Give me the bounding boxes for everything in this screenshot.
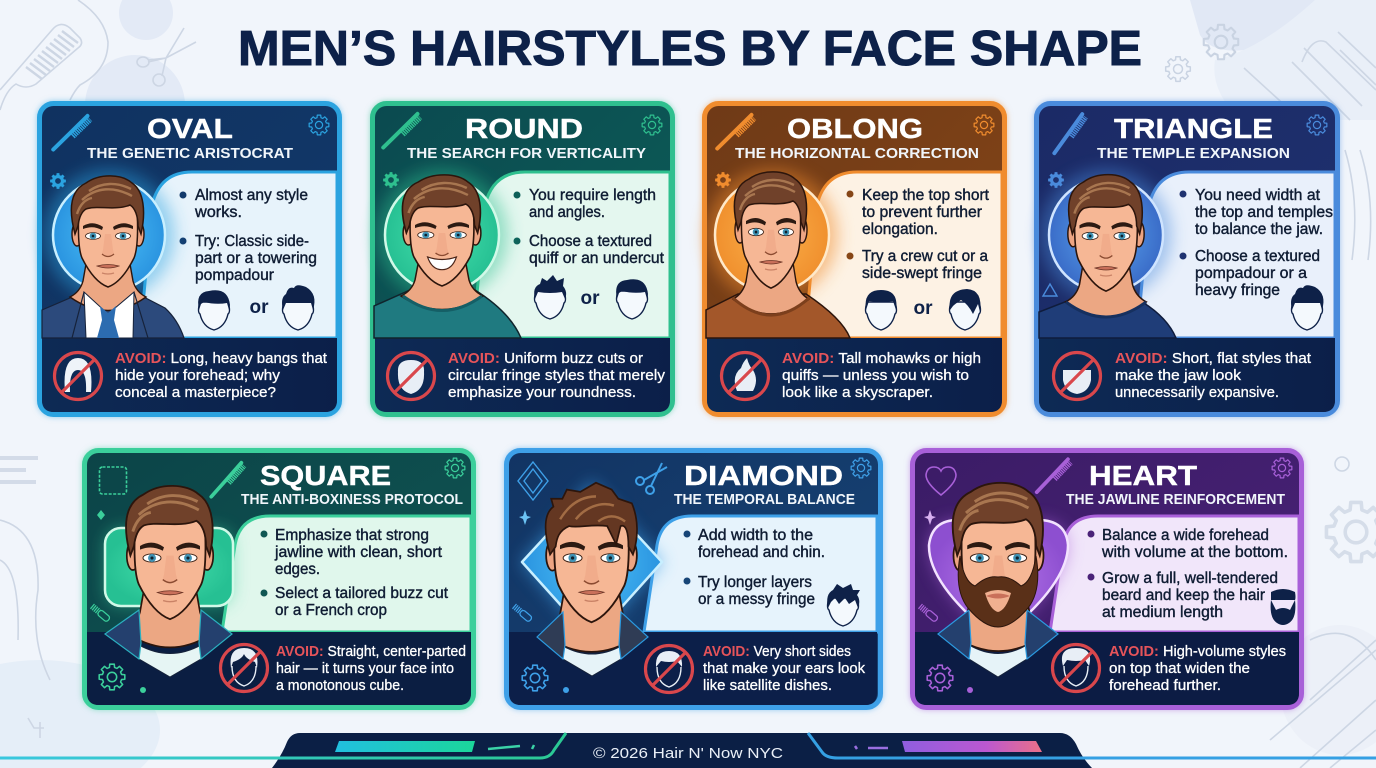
avoid band <box>87 632 471 705</box>
sparkle <box>924 510 936 525</box>
icon: gear <box>1307 115 1327 135</box>
subheading: THE SEARCH FOR VERTICALITY <box>407 146 646 162</box>
avoid text: AVOID: Tall mohawks or high <box>782 350 981 367</box>
icon: small gear <box>715 172 731 188</box>
icon: heart outline <box>926 467 956 495</box>
panel: square <box>84 450 474 708</box>
portrait <box>105 486 233 677</box>
avoid text: quiffs — unless you wish to <box>782 367 969 384</box>
avoid text: hide your forehead; why <box>115 367 281 384</box>
avoid text: a monotonous cube. <box>276 677 404 694</box>
icon: gear lower <box>522 665 548 691</box>
icon: textured pompadour <box>1291 285 1323 330</box>
tips panel <box>644 516 877 632</box>
icon: no center part <box>220 644 268 692</box>
icon: no high volume <box>1052 644 1100 692</box>
icon: undercut <box>616 279 648 319</box>
avoid band <box>42 338 337 412</box>
avoid text <box>1115 350 1312 401</box>
subheading: THE TEMPLE EXPANSION <box>1097 146 1290 162</box>
subheading: THE ANTI-BOXINESS PROTOCOL <box>241 492 463 508</box>
icon: scissors <box>636 463 667 494</box>
avoid text: AVOID: Very short sides <box>703 643 851 660</box>
avoid band <box>915 632 1299 705</box>
avoid text: emphasize your roundness. <box>448 384 636 401</box>
avoid text <box>703 643 865 694</box>
heading: oblong: OBLONG <box>787 113 923 144</box>
bullet text: elongation. <box>862 221 938 238</box>
bullet text <box>846 187 990 282</box>
portrait <box>374 169 521 338</box>
bullet text: jawline with clean, short <box>274 544 443 561</box>
avoid text: forehead further. <box>1109 677 1221 694</box>
bullet text: side-swept fringe <box>862 265 982 282</box>
avoid text: unnecessarily expansive. <box>1115 384 1279 401</box>
icon: gear lower <box>927 665 953 691</box>
icon: quiff <box>534 275 566 319</box>
bullet text: and angles. <box>529 204 605 221</box>
bullet text: Choose a textured <box>529 233 652 250</box>
icon: gear <box>974 115 994 135</box>
heading: oval: OVAL <box>147 113 233 144</box>
avoid text <box>1109 643 1286 694</box>
avoid band <box>707 338 1002 412</box>
portrait <box>520 480 664 676</box>
avoid text <box>276 643 466 694</box>
bullet text: Try: Classic side- <box>195 233 309 250</box>
bullet text <box>684 527 825 608</box>
icon: comb <box>380 114 421 148</box>
icon: hair clip <box>90 604 111 622</box>
tips panel <box>222 516 471 632</box>
panel: triangle <box>1036 104 1338 414</box>
bullet text: Almost any style <box>195 187 308 204</box>
icon: small gear <box>1048 172 1064 188</box>
footer right line <box>808 733 1376 758</box>
bullet text: works. <box>194 204 242 221</box>
bullet text: edges. <box>275 561 320 578</box>
bullet text: Choose a textured <box>1195 248 1320 265</box>
icon: no mohawk <box>722 352 768 400</box>
portrait <box>1039 169 1176 338</box>
or: or <box>580 288 600 309</box>
copyright: © 2026 Hair N' Now NYC <box>593 745 783 762</box>
avoid text: like satellite dishes. <box>703 677 832 694</box>
footer left line <box>0 733 566 758</box>
icon: comb <box>208 463 245 497</box>
heading: round: ROUND <box>465 113 583 144</box>
bullet text <box>1180 187 1333 299</box>
title: MEN’S HAIRSTYLES BY FACE SHAPE <box>238 22 1142 76</box>
bullet text: part or a towering <box>195 250 317 267</box>
avoid text: AVOID: Uniform buzz cuts or <box>448 350 643 367</box>
icon: diamond outline <box>518 462 548 500</box>
icon: no buzz cut <box>388 352 434 400</box>
bullet text: Emphasize that strong <box>275 527 429 544</box>
icon: pompadour <box>282 285 314 330</box>
panel: round <box>372 104 672 414</box>
panel: diamond <box>506 450 880 708</box>
avoid band <box>509 632 877 705</box>
avoid text <box>448 350 666 401</box>
avoid text <box>782 350 981 401</box>
icon: side part <box>198 290 230 330</box>
avoid text: AVOID: Straight, center-parted <box>276 643 466 660</box>
bullet text: Select a tailored buzz cut <box>275 585 449 602</box>
avoid text: AVOID: Short, flat styles that <box>1115 350 1312 367</box>
bullet text: You need width at <box>1195 187 1321 204</box>
subheading: THE GENETIC ARISTOCRAT <box>87 146 293 162</box>
icon: beard <box>1271 589 1296 625</box>
icon: small gear <box>383 172 399 188</box>
sparkle <box>519 510 531 525</box>
subheading: THE HORIZONTAL CORRECTION <box>735 146 979 162</box>
icon: gear <box>309 115 329 135</box>
bullet text: pompadour <box>195 267 274 284</box>
icon: comb <box>1050 114 1087 154</box>
bullet text: Balance a wide forehead <box>1102 527 1269 544</box>
footer left dashes <box>488 745 534 749</box>
icon: no bangs <box>54 352 102 400</box>
tips panel <box>1137 172 1335 338</box>
bullet text: heavy fringe <box>1195 282 1280 299</box>
bullet text <box>514 187 665 267</box>
heading: triangle: TRIANGLE <box>1114 113 1273 144</box>
icon: comb <box>1033 459 1072 493</box>
bullet text: beard and keep the hair <box>1102 587 1265 604</box>
bullet text: to balance the jaw. <box>1195 221 1323 238</box>
avoid text: that make your ears look <box>703 660 865 677</box>
icon: gear <box>851 458 871 478</box>
bullet text: Try a crew cut or a <box>862 248 988 265</box>
footer left pill <box>335 741 475 752</box>
avoid text: hair — it turns your face into <box>276 660 454 677</box>
icon: gear <box>445 458 465 478</box>
subheading: THE TEMPORAL BALANCE <box>674 492 855 508</box>
bullet text: Try longer layers <box>698 574 812 591</box>
avoid text: on top that widen the <box>1109 660 1250 677</box>
accent dot <box>967 687 973 693</box>
subheading: THE JAWLINE REINFORCEMENT <box>1066 492 1285 508</box>
bullet text <box>260 527 449 619</box>
avoid text: circular fringe styles that merely <box>448 367 666 384</box>
icon: no short sides <box>646 646 692 692</box>
tips panel <box>805 172 1002 338</box>
tips panel <box>1050 516 1299 632</box>
bullet text: or a messy fringe <box>698 591 815 608</box>
bullet text: forehead and chin. <box>698 544 825 561</box>
heading: diamond: DIAMOND <box>684 460 843 491</box>
bullet text <box>180 187 317 284</box>
avoid text: make the jaw look <box>1115 367 1242 384</box>
avoid text: AVOID: Long, heavy bangs that <box>115 350 328 367</box>
icon: gear <box>1272 458 1292 478</box>
panel: oval <box>40 104 340 414</box>
avoid text: conceal a masterpiece? <box>115 384 276 401</box>
bullet text: to prevent further <box>862 204 982 221</box>
icon: crew cut <box>866 290 896 330</box>
avoid text: AVOID: High-volume styles <box>1109 643 1286 660</box>
bullet text: the top and temples <box>1195 204 1333 221</box>
footer <box>0 733 1376 768</box>
avoid text: look like a skyscraper. <box>782 384 933 401</box>
tips panel <box>140 172 337 338</box>
footer right pill <box>902 741 1042 752</box>
portrait <box>42 169 184 338</box>
panel: heart <box>912 450 1302 708</box>
icon: gear lower <box>99 664 125 690</box>
bullet text: Grow a full, well-tendered <box>1102 570 1278 587</box>
bullet text: quiff or an undercut <box>529 250 665 267</box>
portrait <box>929 483 1068 677</box>
bullet text: pompadour or a <box>1195 265 1307 282</box>
icon: side-swept fringe <box>950 289 980 330</box>
icon: gear <box>642 115 662 135</box>
icon: square outline <box>100 467 126 494</box>
bullet text: You require length <box>529 187 656 204</box>
icon: comb <box>50 116 91 150</box>
bullet text: at medium length <box>1102 604 1223 621</box>
or: or <box>914 298 933 319</box>
footer right dashes <box>855 746 888 749</box>
avoid text <box>115 350 328 401</box>
bullet text: Add width to the <box>698 527 813 544</box>
icon: comb <box>714 115 755 149</box>
avoid band <box>1039 338 1335 412</box>
bullet text: or a French crop <box>275 602 387 619</box>
accent dot <box>563 687 569 693</box>
icon: no flat style <box>1054 352 1100 400</box>
icon: messy fringe <box>827 584 860 626</box>
heading: square: SQUARE <box>260 460 391 491</box>
accent dots <box>97 510 146 693</box>
tips panel <box>473 172 670 338</box>
icon: small gear <box>50 173 66 189</box>
bullet text <box>1088 527 1288 621</box>
icon: hair clip <box>512 604 533 622</box>
bullet text: with volume at the bottom. <box>1101 544 1288 561</box>
icon: hair clip <box>918 604 939 622</box>
bullet text: Keep the top short <box>862 187 990 204</box>
or: or <box>250 297 269 318</box>
panel: oblong <box>704 104 1004 414</box>
avoid band <box>375 338 670 412</box>
icon: triangle outline <box>1043 284 1057 296</box>
portrait <box>706 169 850 338</box>
heading: heart: HEART <box>1089 460 1197 491</box>
